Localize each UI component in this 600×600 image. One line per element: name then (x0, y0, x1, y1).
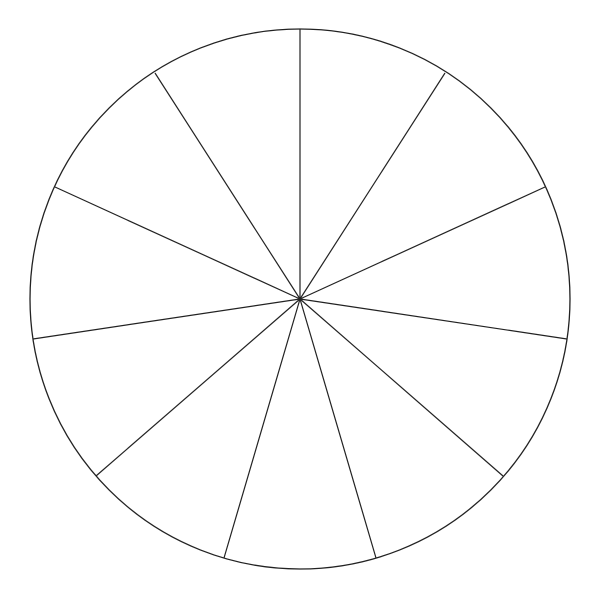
spokes (33, 29, 567, 558)
